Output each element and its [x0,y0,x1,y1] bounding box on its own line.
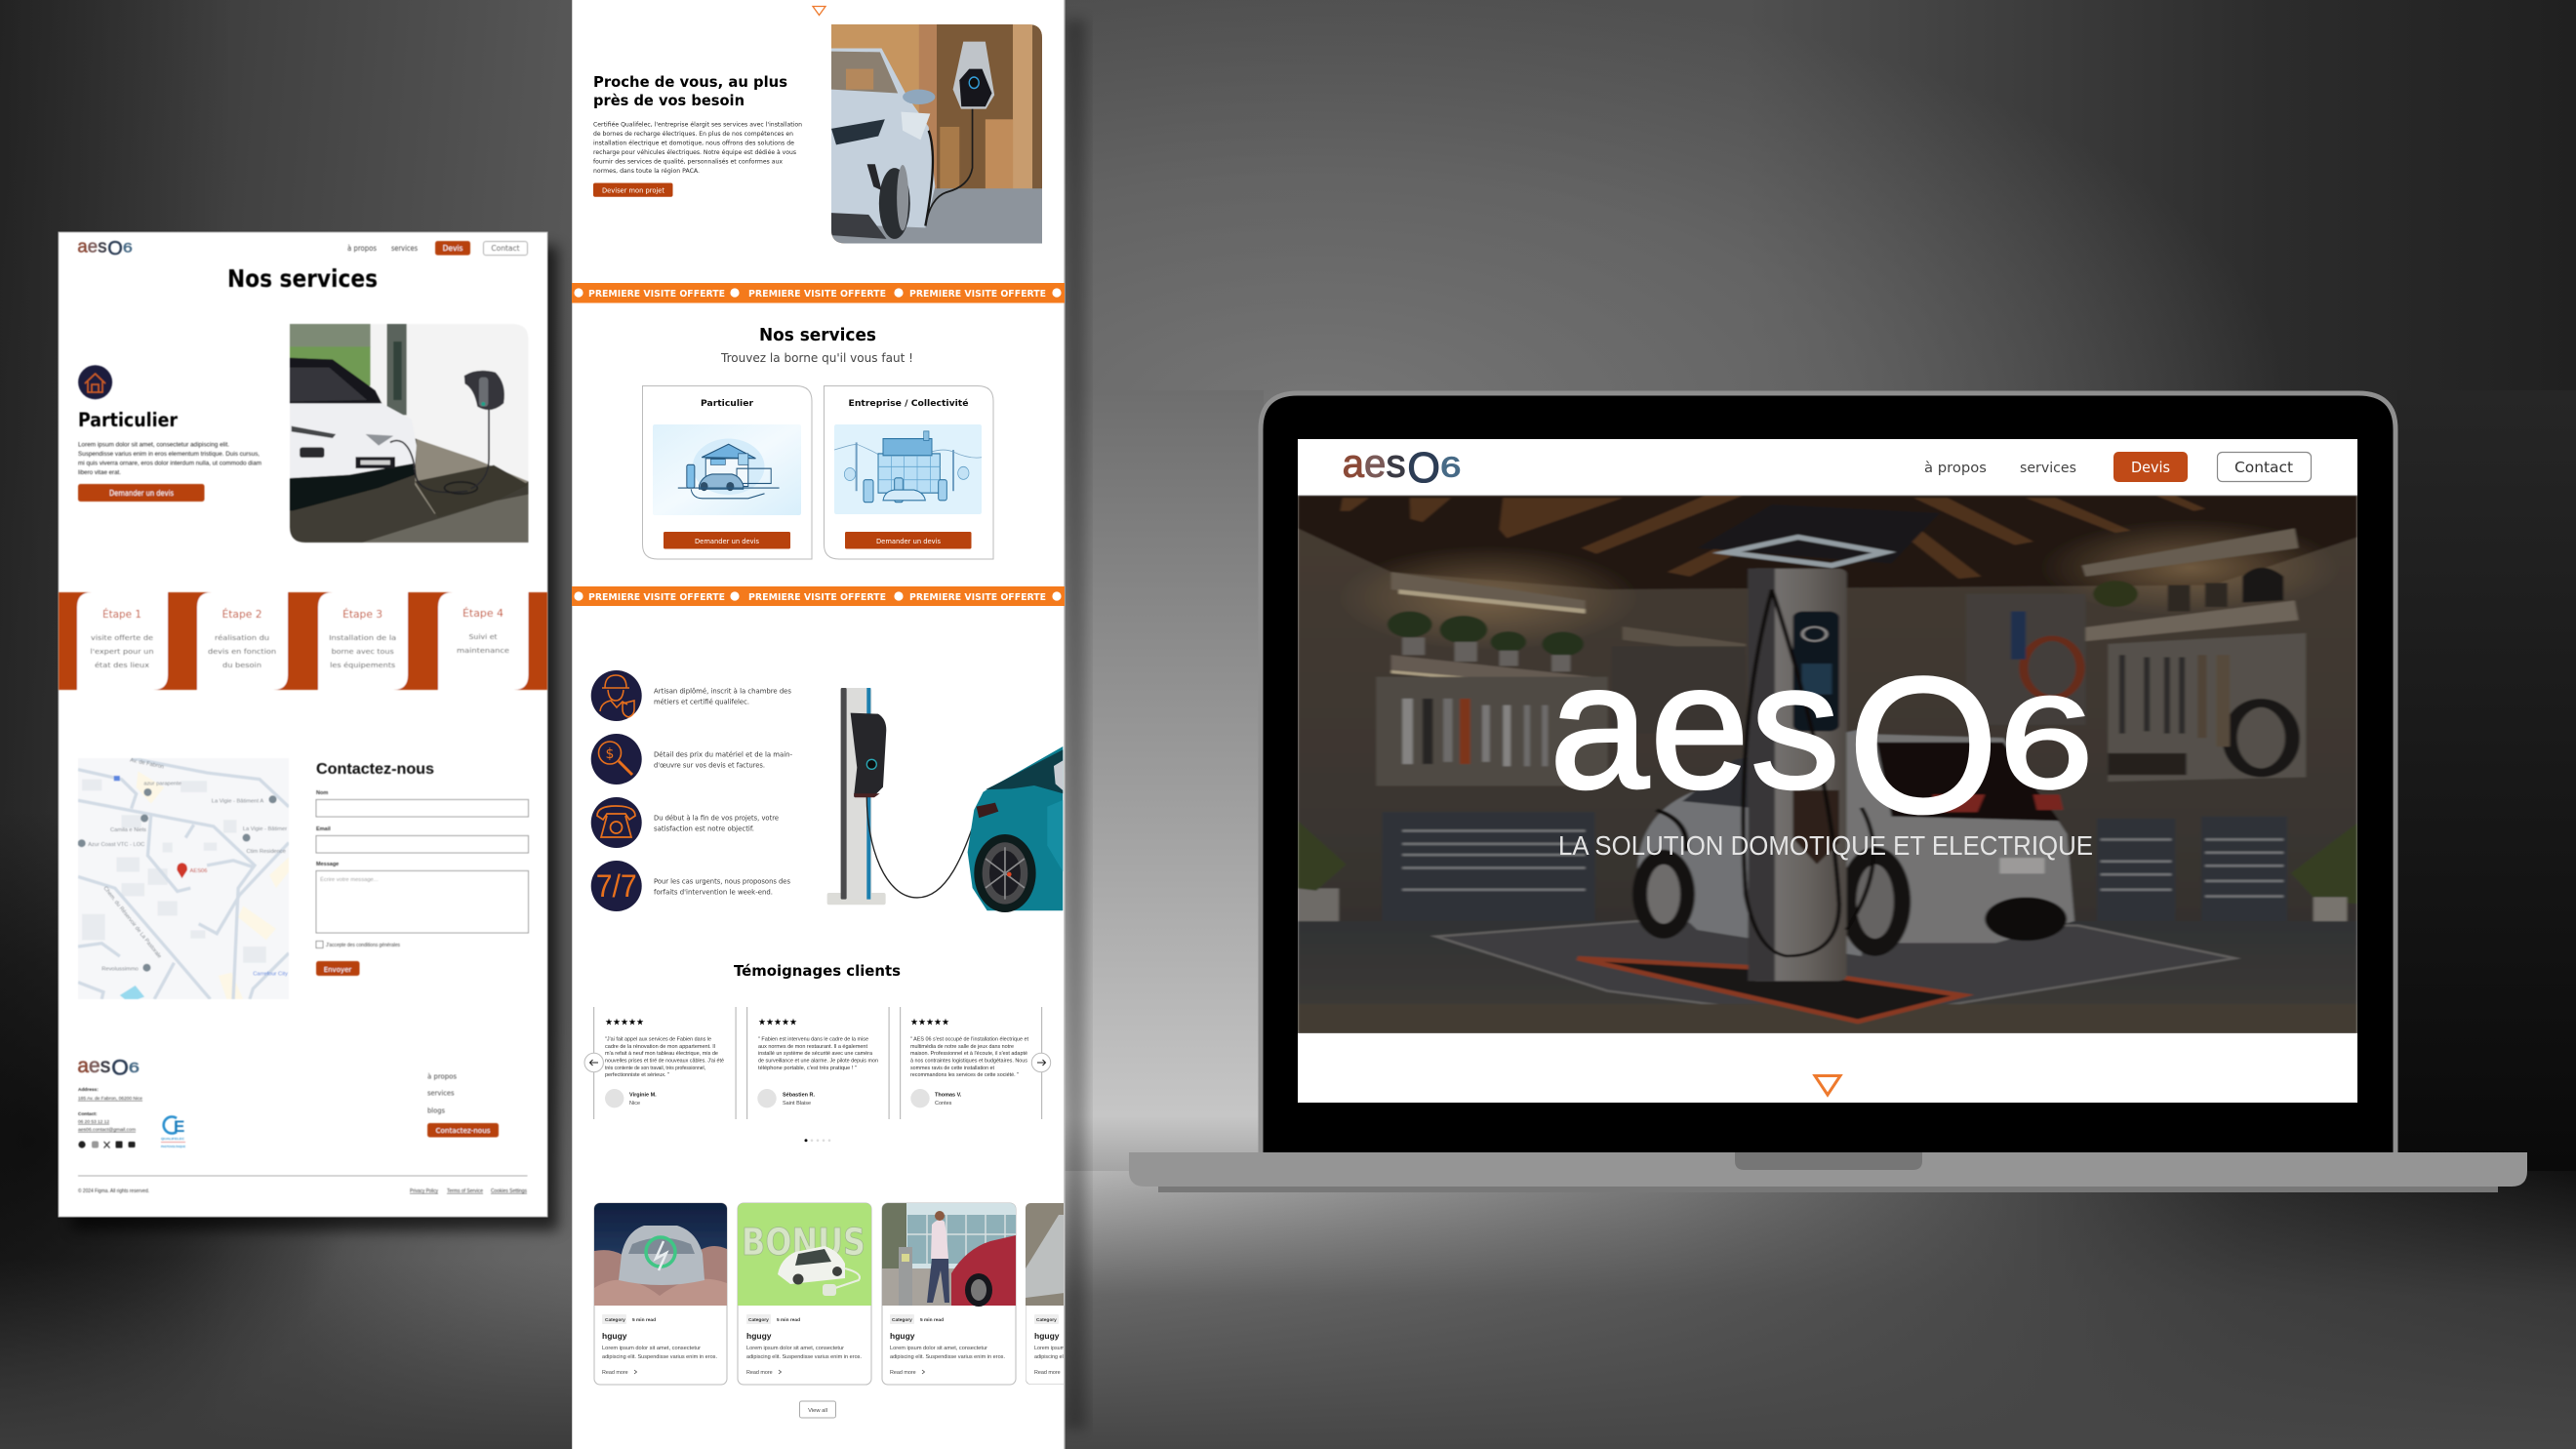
testimonial 2: de surveillance et une alarme. Je pilote depuis mon [758,1058,878,1064]
blog card 3: hgugy [890,1331,915,1341]
footer: left panel: Address: [78,1087,99,1093]
lamp [1697,504,1940,566]
laptop nav: services [2020,461,2076,476]
heading: nos services: Nos services [759,325,876,345]
button: demander un devis [78,484,205,502]
testimonial 1: nouvelles prises et tiré de nouveaux câbles. J'ai été [605,1058,724,1064]
banner: premiere visite offerte 1 [572,283,1065,302]
banner: premiere visite offerte 1: PREMIERE VISITE OFFERTE [748,289,886,300]
logo: footer: e [89,1055,101,1077]
step 4: maintenance [457,646,510,655]
feature list: Artisan diplômé, inscrit à la chambre des [654,687,791,695]
testimonial 2: aux normes de mon restaurant. Il a également [758,1044,868,1050]
testimonial 1: très contente de son travail, très professionnel, [605,1066,705,1071]
map: Revolussimmo [101,967,139,973]
testimonial 2: téléphone portable, c'est très pratique ! " [758,1066,857,1071]
testimonial 3: ★★★★★ [910,1017,949,1028]
step 2: réalisation du [215,633,269,642]
contact form: Envoyer [324,966,351,974]
arrow: scroll indicator [1815,1075,1840,1095]
logo: laptop nav: O [1407,445,1440,492]
card: entreprise / collectivité: Entreprise / Collectivité [849,398,969,409]
contact form: Contactez-nous [316,761,434,778]
map: Camila e Niels [110,827,146,833]
step 2: devis en fonction [208,647,276,656]
map: Azur Coast VTC - LOC [88,842,144,848]
logo: left panel nav: e [88,235,98,256]
logo: footer: a [77,1055,89,1077]
testimonial 3: Contes [935,1101,952,1107]
nav: left panel: Devis [443,244,463,253]
map [77,757,289,999]
icon: certified worker [591,670,642,721]
logo: left panel nav: 6 [123,241,133,256]
laptop nav: à propos [1924,461,1987,476]
map: azur parapente [143,782,181,787]
footer: left panel: Contactez-nous [435,1127,491,1135]
blog card 2 [738,1203,871,1385]
heading: proche de vous: près de vos besoin [593,92,745,109]
nav: left panel: Contact [491,244,520,253]
blog card 3: Read more [890,1370,916,1376]
contact form: J'accepte des conditions générales [326,943,400,948]
feature list [591,670,792,911]
feature list: Détail des prix du matériel et de la main- [654,751,792,759]
testimonial 2: Saint Blaise [783,1101,811,1107]
qualifelec badge [161,1116,185,1148]
hero logo: 6 [1999,669,2093,815]
heading: Particulier: Particulier [78,409,178,431]
arrow: previous [584,1053,603,1072]
step 3 [329,608,396,669]
banner: premiere visite offerte 2: PREMIERE VISITE OFFERTE [748,592,886,603]
blog card 4 (cropped) [1026,1203,1064,1385]
blog card 1: Read more [602,1370,628,1376]
blog card 3 [882,1203,1016,1385]
laptop lid [1261,393,2395,1155]
blog card 3: 5 min read [920,1317,944,1323]
map: Av. de Fabron [129,757,164,771]
hero logo: O [1848,637,1998,853]
testimonial 2: ★★★★★ [758,1017,797,1028]
photo: silver car at wooden wall charger [831,24,1042,244]
hero logo: a [1550,625,1649,825]
hero logo: e [1650,625,1750,825]
icon: house [78,365,112,399]
testimonial 1 [605,1017,724,1107]
footer: left panel [77,1055,527,1194]
footer: left panel: 06 20 53 12 12 [78,1119,109,1125]
banner: premiere visite offerte 2 [572,586,1065,606]
feature list: d'œuvre sur vos devis et factures. [654,761,765,769]
testimonial 1: Virginie M. [629,1093,657,1099]
footer: left panel: Cookies Settings [491,1188,527,1194]
logo: laptop nav: s [1387,443,1406,486]
blog card 1: 5 min read [632,1317,656,1323]
heading: proche de vous: Proche de vous, au plus [593,73,787,91]
logo: left panel nav [77,235,133,260]
illustration: house with charger [653,424,801,515]
photo: white car charging at wall box [290,324,529,543]
logo: footer: 6 [129,1059,140,1075]
step 3: borne avec tous [332,647,394,656]
button: view all: View all [808,1408,827,1414]
icon: telephone [591,797,642,848]
middle website panel: home page scroll [572,0,1084,1449]
blog card 1: Lorem ipsum dolor sit amet, consectetur [602,1346,701,1351]
blog card 2: adipiscing elit. Suspendisse varius enim in eros. [746,1354,862,1360]
laptop nav: Devis [2131,459,2170,476]
icon: price magnifier: $ [606,746,614,762]
footer: left panel: Contact: [78,1111,98,1117]
icon: price magnifier [591,734,642,785]
banner: premiere visite offerte 1: PREMIERE VISITE OFFERTE [909,289,1046,300]
laptop screen [1298,439,2357,1103]
testimonial 3 [910,1017,1029,1107]
testimonial 2: " Fabien est intervenu dans le cadre de la mise [758,1036,868,1042]
step 4: Étape 4 [463,607,503,620]
testimonial 1: ★★★★★ [605,1017,644,1028]
nav: left panel [347,241,527,256]
blog card 1: hgugy [602,1331,627,1341]
footer: left panel: blogs [427,1107,446,1114]
parked car [1632,729,2074,956]
laptop nav: Contact [2234,459,2293,476]
carousel dots [804,1139,830,1142]
map: La Vigie - Bâtimer [243,826,287,832]
button: deviser mon projet: Deviser mon projet [602,187,664,195]
footer: left panel: Privacy Policy [410,1188,438,1194]
paragraph: qualifelec: de bornes de recharge électriques. En plus de nos compétences en [593,130,793,138]
logo: footer [77,1055,140,1080]
testimonial 1: m'a refait à neuf mon tableau électrique, mis de [605,1051,718,1057]
step 1 [90,608,154,669]
paragraph: qualifelec: recharge pour véhicules électriques. Notre équipe est dédiée à vous [593,148,796,156]
feature list: forfaits d'intervention le week-end. [654,888,773,896]
paragraph: qualifelec: fournir des services de qualité, personnalisés et conformes aux [593,158,783,166]
logo: footer: O [111,1056,129,1080]
testimonial 2: Sébastien R. [783,1093,815,1099]
blog card 3: Category [892,1317,912,1323]
contact form: Écrire votre message... [320,876,379,883]
card: entreprise / collectivité: Demander un devis [876,538,941,545]
button: view all [800,1401,835,1418]
hero tagline: LA SOLUTION DOMOTIQUE ET ELECTRIQUE [1558,830,2093,861]
paragraph: particulier: mi quis viverra ornare, eros dolor interdum nulla, ut commodo diam [78,461,262,466]
card: entreprise / collectivité [824,386,993,559]
blog card 2: BONUS [742,1221,865,1264]
logo: footer: s [101,1055,110,1077]
blog card 4 (cropped): adipiscing elit. [1034,1354,1067,1360]
testimonial 3: " AES 06 s'est occupé de l'installation électrique et [910,1036,1029,1042]
card: particulier: Particulier [701,399,754,409]
steps band [59,592,547,690]
testimonial 3: sommes ravis de cette installation et [910,1066,995,1071]
step 3: les équipements [330,661,395,669]
testimonial 3: multimédia de notre salle de jeux dans notre [910,1044,1014,1050]
blog card 4 (cropped): Category [1036,1317,1057,1323]
step 3: Étape 3 [342,608,382,621]
contact form: Email [316,826,331,832]
testimonial 3: recommandons les services de cette société. " [910,1072,1019,1078]
testimonial 3: Thomas V. [935,1093,962,1099]
step 4: Suivi et [468,632,498,641]
qualifelec badge: QUALIFELEC [161,1137,184,1141]
footer: left panel: services [427,1089,455,1097]
illustration: charging station and teal car [827,688,1063,912]
footer: left panel: 185 Av. de Fabron, 06200 Nice [78,1096,142,1102]
paragraph: qualifelec [593,121,802,175]
blog card 1: Category [605,1317,625,1323]
blog card 4 (cropped): Lorem ipsum dolor [1034,1346,1078,1351]
qualifelec badge: E [174,1117,184,1136]
paragraph: particulier: Suspendisse varius enim in eros elementum tristique. Duis cursus, [78,451,260,458]
nav: left panel: services [391,244,418,253]
testimonial 1: Nice [629,1101,640,1107]
testimonial 1: cadre de la rénovation de mon appartement. Il [605,1044,715,1050]
footer: left panel: Terms of Service [447,1188,483,1194]
map: Chem. du Réservoir de La Pastorale [101,886,162,959]
map: Carrefour City [253,971,288,977]
step 3: Installation de la [329,633,396,642]
logo: laptop nav: a [1343,443,1365,486]
card: particulier: Demander un devis [695,538,759,545]
testimonial 3: à nos contraintes logistiques et budgétaires. Nous [910,1058,1027,1064]
paragraph: qualifelec: normes, dans toute la région PACA. [593,167,700,175]
hero logo: s [1751,625,1840,825]
blog card 2: hgugy [746,1331,772,1341]
logo: left panel nav: a [77,235,88,256]
contact form: Nom [316,790,328,796]
heading: témoignages clients: Témoignages clients [734,962,901,980]
step 2 [208,608,276,669]
banner: premiere visite offerte 2: PREMIERE VISITE OFFERTE [588,592,725,603]
paragraph: particulier: Lorem ipsum dolor sit amet, consectetur adipiscing elit. [78,441,229,449]
testimonial 1: "J'ai fait appel aux services de Fabien dans le [605,1036,711,1042]
blog card 1 [594,1203,727,1385]
feature list: Pour les cas urgents, nous proposons des [654,878,790,886]
step 1: état des lieux [95,661,150,669]
testimonial 2: installé un système de sécurité avec une caméra [758,1051,872,1057]
map: La Vigie - Bâtiment A [212,798,263,804]
step 2: du besoin [222,661,262,669]
logo: left panel nav: O [107,238,123,260]
laptop nav [1298,439,2357,496]
footer: left panel: aes06.contact@gmail.com [78,1127,136,1133]
testimonial 1: perfectionniste et sérieux. " [605,1072,669,1078]
laptop base [1129,1152,2527,1192]
contact form [316,761,529,976]
step 2: Étape 2 [222,608,262,621]
feature list: métiers et certifié qualifelec. [654,699,749,706]
blog card 3: adipiscing elit. Suspendisse varius enim in eros. [890,1354,1005,1360]
arrow: next [1031,1053,1051,1072]
heading: proche de vous [593,73,787,109]
qualifelec badge: PHOTOVOLTAIQUE [161,1145,185,1148]
paragraph: particulier [78,441,262,476]
footer: left panel: © 2024 Figma. All rights reserved. [78,1187,149,1194]
blog card 2: Lorem ipsum dolor sit amet, consectetur [746,1346,844,1351]
button: demander un devis: Demander un devis [109,489,174,498]
logo: laptop nav: e [1364,443,1386,486]
card: particulier [642,386,812,559]
step 4 [457,607,510,655]
contact form: Message [316,862,339,867]
blog card 3: Lorem ipsum dolor sit amet, consectetur [890,1346,987,1351]
hero photo: garage with charging station [1298,496,2357,1033]
banner: premiere visite offerte 2: PREMIERE VISITE OFFERTE [909,592,1046,603]
nav: left panel: à propos [347,244,377,253]
charging post [1578,569,1962,1022]
blog card 4 (cropped): hgugy [1034,1331,1060,1341]
logo: left panel nav: s [98,235,106,256]
blog card 4 (cropped): Read more [1034,1370,1061,1376]
step 1: l'expert pour un [90,647,154,656]
button: deviser mon projet [593,183,673,197]
logo: laptop nav: 6 [1440,453,1461,484]
map: Ctim Residence [247,849,286,855]
blog card 2: Category [748,1317,769,1323]
blog card 2: Read more [746,1370,773,1376]
heading: Nos services: Nos services [227,264,378,293]
blog card 2: 5 min read [777,1317,800,1323]
paragraph: particulier: libero vitae erat. [78,469,121,476]
testimonials carousel [584,1007,1051,1142]
footer: left panel: à propos [427,1073,458,1081]
step 1: visite offerte de [91,633,154,642]
feature list: Du début à la fin de vos projets, votre [654,814,779,822]
icon: 7/7: 7/7 [596,868,637,904]
illustration: office with chargers [834,424,982,514]
paragraph: qualifelec: installation électrique et domotique, nous offrons des solutions de [593,139,794,146]
left website panel: services page [59,232,558,1230]
banner: premiere visite offerte 1: PREMIERE VISITE OFFERTE [588,289,725,300]
arrow: scroll indicator [813,6,825,16]
hero logo [1550,625,2093,853]
testimonial 3: maison. Professionnel et à l'écoute, il s'est adapté [910,1051,1027,1057]
logo: laptop nav [1343,443,1461,492]
blog card 1: adipiscing elit. Suspendisse varius enim in eros. [602,1354,717,1360]
laptop mockup [1129,393,2527,1192]
step 1: Étape 1 [102,608,141,621]
map: AES06 [190,868,207,874]
paragraph: qualifelec: Certifiée Qualifelec, l'entreprise élargit ses services avec l'installation [593,121,802,129]
testimonial 2 [757,1017,878,1107]
icon: 7/7 [591,861,642,911]
feature list: satisfaction est notre objectif. [654,825,754,833]
subtitle: Trouvez la borne qu'il vous faut ! [720,351,913,365]
